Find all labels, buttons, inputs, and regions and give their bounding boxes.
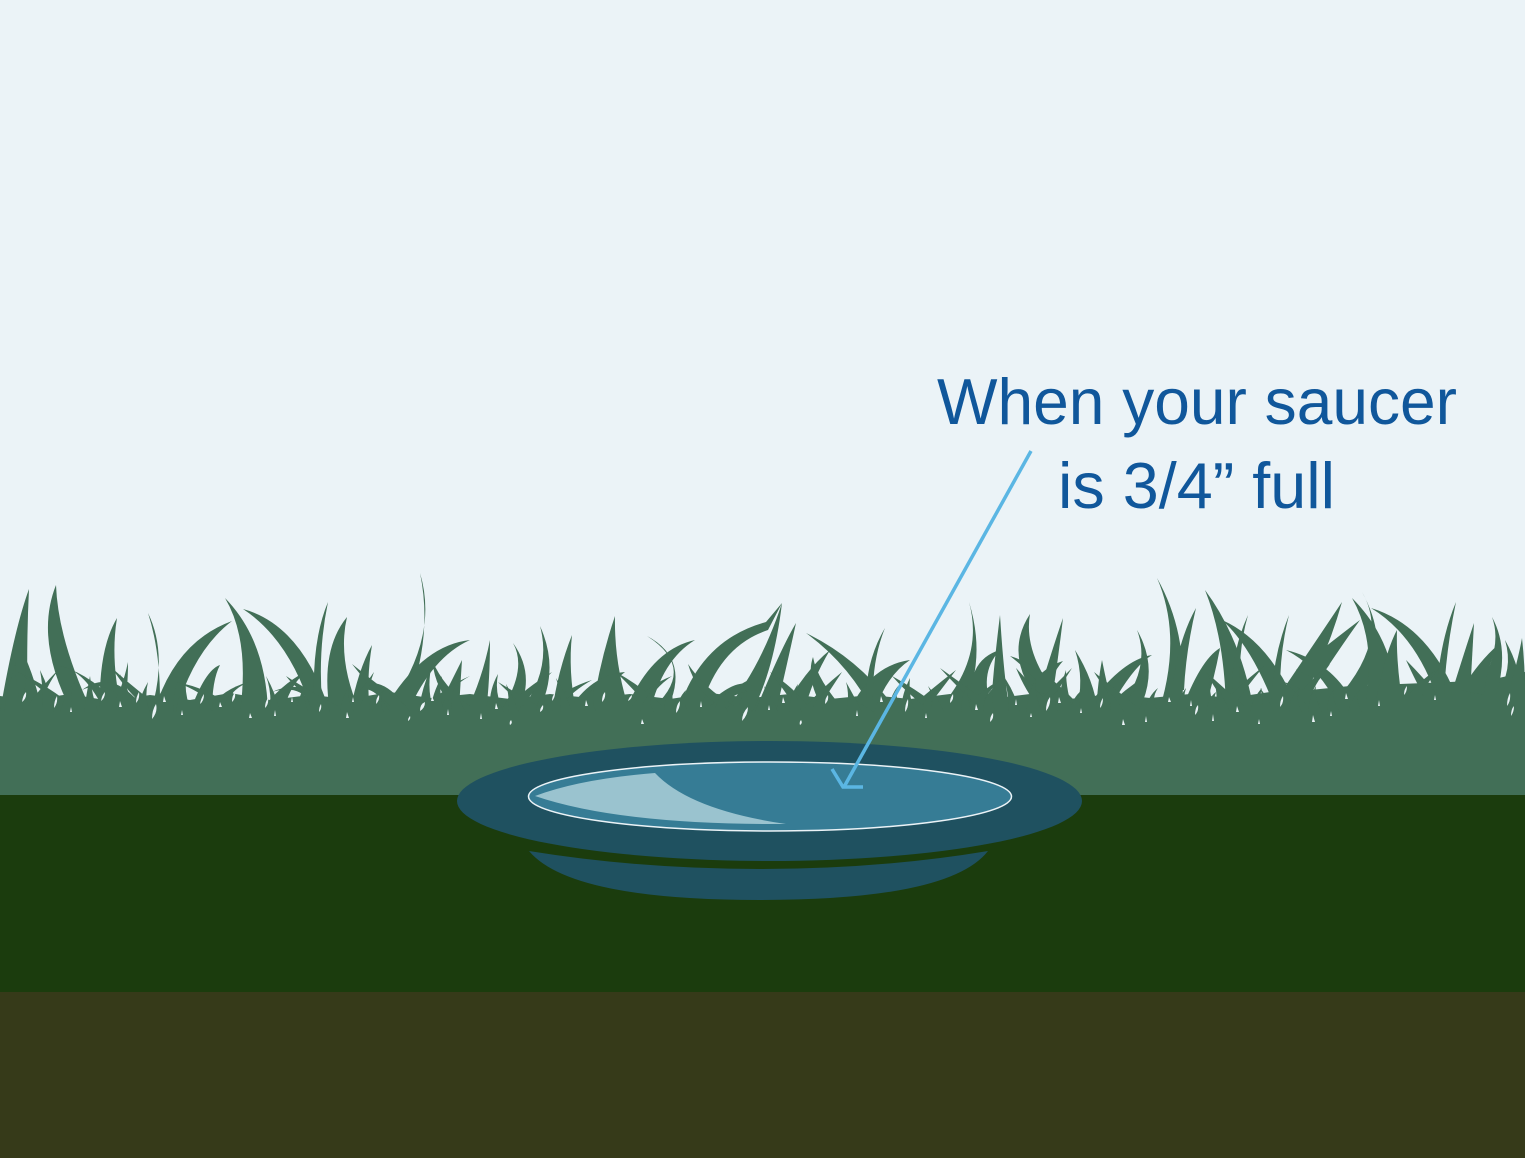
grass base band: [0, 672, 1525, 795]
water highlight: [535, 773, 786, 824]
grass gaps: [22, 686, 1514, 725]
dark green ground: [0, 795, 1525, 992]
left tall blades: [0, 589, 29, 712]
right blades: [1018, 614, 1072, 712]
water surface: [528, 762, 1012, 831]
callout line 2: is 3/4” full: [1058, 449, 1335, 522]
grass silhouette: [0, 573, 1525, 795]
saucer foot: [529, 851, 988, 900]
crossing grass stems: [18, 660, 1440, 706]
arrow head: [832, 769, 863, 787]
callout arrow: [832, 451, 1031, 787]
arrow shaft: [844, 451, 1031, 787]
saucer rim: [457, 741, 1082, 861]
sky background: [0, 0, 1525, 795]
saucer: [457, 741, 1082, 900]
middle blades: [500, 643, 526, 712]
brown soil: [0, 992, 1525, 1158]
callout line 1: When your saucer: [937, 365, 1457, 438]
small dense blades: [4, 662, 1362, 712]
callout text: [937, 365, 1457, 522]
